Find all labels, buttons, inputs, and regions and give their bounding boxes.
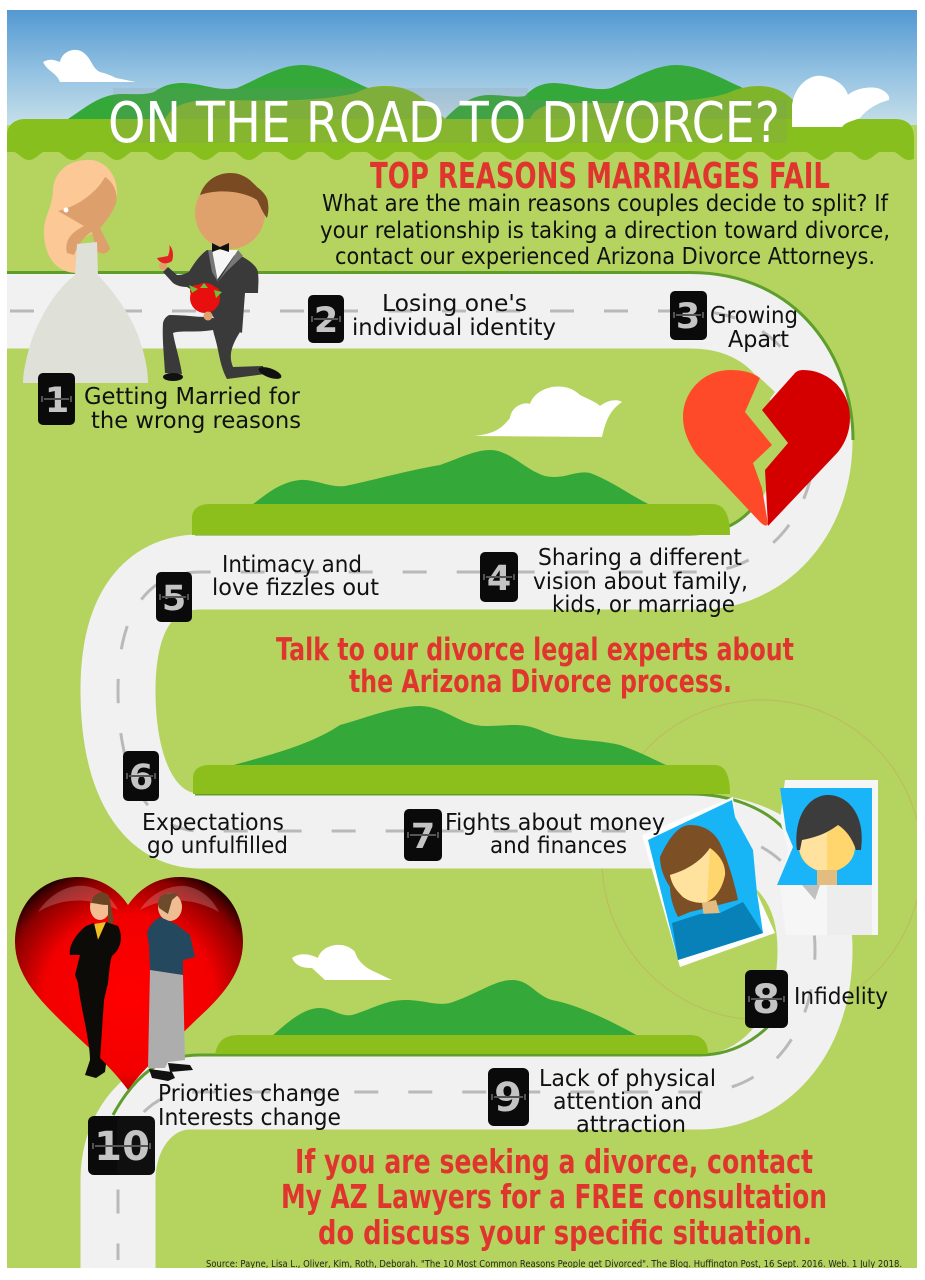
cloud: middle [474,386,622,437]
badge 7: 7 [411,817,435,857]
label 6: go unfulfilled [147,831,288,859]
illustration: torn photo of man [777,780,878,935]
illustration: bride [23,160,148,383]
label 9: Lack of physical [539,1064,716,1092]
label 9 [539,1064,716,1138]
label 6: Expectations [142,808,284,836]
callout: talk to experts: the Arizona Divorce process. [349,664,732,700]
title backdrop [113,88,787,143]
callout: free consultation [281,1142,827,1252]
label 5: love fizzles out [212,573,379,601]
badge 1: 1 [45,381,69,421]
label 10 [158,1079,341,1131]
badge 2 [308,295,344,343]
badge 8: 8 [752,977,780,1023]
header hills [68,65,815,119]
badge 10: 1 [94,1124,122,1170]
label 2: individual identity [352,313,556,341]
cloud: lower [292,945,392,980]
badge 5 [156,572,192,622]
badge 6: 6 [129,758,153,798]
label 7 [447,812,664,854]
label 2: Losing one's [382,289,527,317]
label 7: Fights about money [445,808,665,836]
label 1: Getting Married for [84,382,300,410]
label 4 [533,543,748,618]
intro text [320,191,890,270]
label 4: kids, or marriage [552,590,735,618]
cloud: top right [792,76,889,127]
badge 4: 4 [487,559,511,599]
badge 3: 3 [676,297,700,337]
label 3 [711,306,796,352]
label 9: attraction [576,1110,686,1138]
label 3: Growing [710,301,798,329]
label 10: Priorities change [158,1079,340,1107]
label 7: and finances [490,831,627,859]
label 10: Interests change [158,1103,341,1131]
badge 1 [38,373,75,425]
badge 10: 0 [122,1124,150,1170]
badge 4 [480,552,518,602]
woman [70,892,121,1078]
label 5: Intimacy and [222,550,362,578]
hills: section 6-7 [193,706,730,794]
cloud: top left [43,50,136,82]
label 1: the wrong reasons [91,406,301,434]
hills: section 9-10 [215,980,708,1054]
man [147,893,195,1081]
illustration: torn photo of woman [642,797,775,967]
badge 6 [123,751,159,801]
intro text: your relationship is taking a direction toward divorce, [320,218,890,244]
illustration: heart with couple [15,877,243,1090]
decorative circle [602,700,922,1020]
label 1 [85,386,300,433]
label 8: Infidelity [794,982,888,1010]
illustration: groom [157,173,283,381]
badge 5: 5 [162,579,186,619]
badge 8 [745,970,788,1028]
icon: broken heart [683,370,850,526]
label 4: vision about family, [533,567,748,595]
badge 9 [488,1068,529,1126]
badge 9: 9 [494,1075,522,1121]
header green band [7,119,914,161]
hills: section 4-5 [192,450,730,535]
title: ON THE ROAD TO DIVORCE? [108,91,780,156]
badge 3 [670,291,707,340]
road [0,272,853,1275]
label 9: attention and [553,1087,702,1115]
intro text: contact our experienced Arizona Divorce Attorneys. [335,244,875,270]
label 3: Apart [728,325,789,353]
intro text: What are the main reasons couples decide to split? If [322,191,889,217]
label 4: Sharing a different [538,543,742,571]
label 6 [144,812,286,858]
badge 10 [88,1116,155,1175]
badge 7 [404,809,442,861]
callout: talk to experts [276,632,794,700]
label 5 [214,554,378,596]
label 2 [354,294,556,340]
badge 2: 2 [314,301,338,341]
